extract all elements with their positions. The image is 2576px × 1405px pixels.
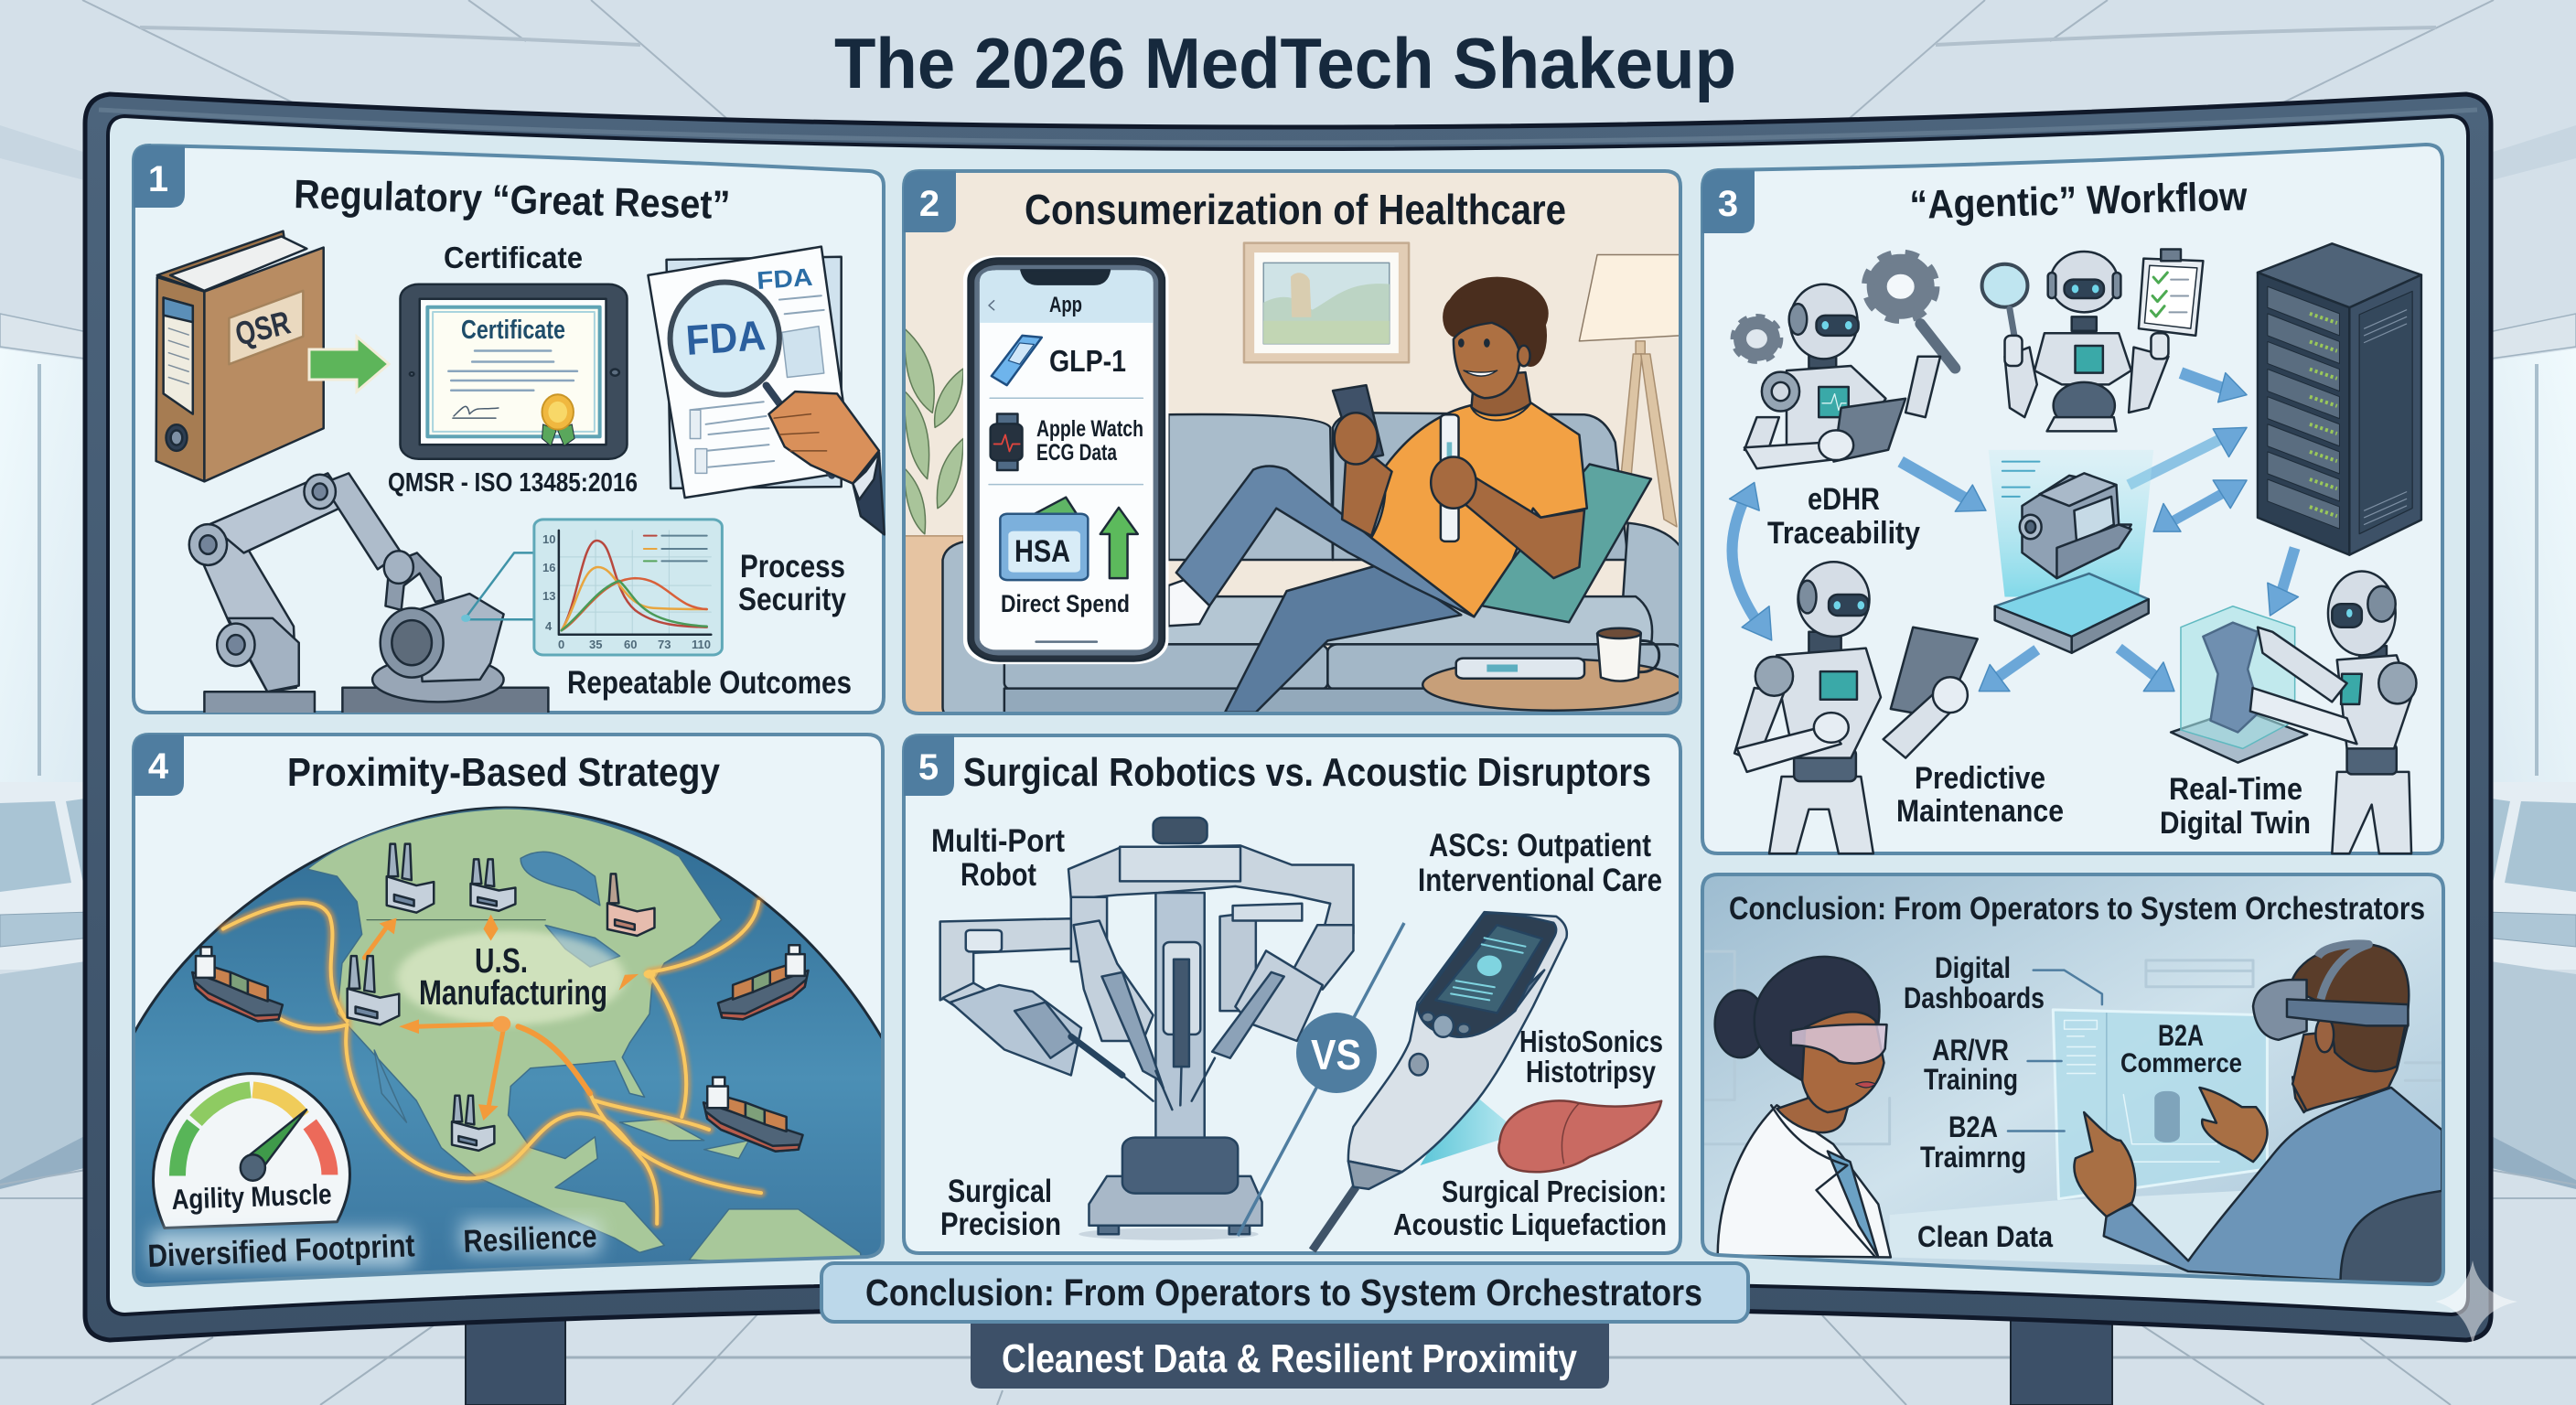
- labels: acoustic side: HistoSonics: [1519, 1024, 1663, 1058]
- label: repeatable outcomes: Repeatable Outcomes: [567, 665, 852, 701]
- badge 3: 3: [1718, 184, 1738, 224]
- robot: digital twin: [2171, 571, 2416, 853]
- phone labels: Direct Spend: [1001, 590, 1130, 617]
- label: qmsr: QMSR - ISO 13485:2016: [388, 468, 638, 498]
- labels: hologram: Clean Data: [1917, 1220, 2053, 1253]
- chart tick labels: 13: [542, 589, 555, 603]
- arrow: green: [309, 337, 389, 391]
- label: us manufacturing: [419, 942, 607, 1013]
- chart tick labels: 35: [589, 638, 602, 651]
- badge 1: [134, 145, 185, 208]
- fda labels: FDA: [756, 263, 813, 295]
- fda labels: FDA: [684, 311, 767, 364]
- illustration: hologram printer: [1989, 450, 2153, 653]
- labels: workflow: Predictive: [1915, 761, 2045, 796]
- labels: hologram: B2A: [1948, 1110, 1998, 1143]
- arrows: workflow: [1730, 373, 2298, 692]
- heading: Proximity-Based Strategy: [287, 750, 720, 795]
- fda labels: [684, 263, 813, 364]
- label: agility muscle: Agility Muscle: [171, 1178, 332, 1216]
- divider: [1238, 923, 1404, 1236]
- labels: acoustic side: Histotripsy: [1526, 1055, 1657, 1089]
- icon: robot arm with part: [189, 473, 722, 716]
- badge 4: [134, 735, 184, 796]
- labels: hologram: Training: [1924, 1063, 2018, 1096]
- chart tick labels: 110: [692, 638, 711, 651]
- illustration: server rack: [2258, 243, 2421, 555]
- labels: workflow: Digital Twin: [2160, 806, 2311, 841]
- labels: acoustic side: ASCs: Outpatient: [1429, 828, 1651, 863]
- title: The 2026 MedTech Shakeup: [834, 23, 1736, 103]
- monitor stand: left leg: [466, 1314, 565, 1405]
- labels: hologram: B2A: [2158, 1019, 2204, 1052]
- halos under labels: [151, 1221, 599, 1267]
- label: certificate: Certificate: [444, 241, 583, 274]
- phone labels: GLP-1: [1049, 344, 1126, 378]
- panel 6 border: [1702, 874, 2443, 1284]
- labels: acoustic side: Acoustic Liquefaction: [1393, 1207, 1667, 1241]
- label: process security: Security: [738, 582, 846, 617]
- robot: predictive: [1734, 562, 1978, 853]
- chart tick labels: 16: [542, 561, 555, 574]
- panel 4 border: [134, 735, 883, 1285]
- heading: Surgical Robotics vs. Acoustic Disruptors: [963, 750, 1651, 795]
- monitor stand: right leg: [2011, 1314, 2112, 1405]
- icon: fda documents and magnifier: [648, 247, 885, 534]
- label: us manufacturing: Manufacturing: [419, 974, 607, 1013]
- robot: edhr: [1735, 256, 1955, 468]
- label: diversified footprint: Diversified Footprint: [147, 1228, 415, 1274]
- living room illustration: [904, 243, 1684, 718]
- phone labels: App: [1049, 293, 1082, 317]
- badge 5: 5: [918, 747, 939, 788]
- labels: workflow: eDHR: [1808, 482, 1880, 517]
- panel 4: proximity-based strategy: [119, 735, 896, 1299]
- labels: robot side: [931, 823, 1065, 1242]
- labels: hologram: Digital: [1935, 951, 2011, 984]
- labels: robot side: Multi-Port: [931, 823, 1065, 859]
- phone labels: Apple Watch: [1036, 416, 1143, 442]
- labels: acoustic side: [1393, 828, 1667, 1241]
- map: globe: [119, 808, 896, 1299]
- panel 6: conclusion: [1702, 874, 2448, 1289]
- illustration: operators with hologram: [1703, 944, 2448, 1289]
- badge 1: 1: [148, 159, 168, 199]
- badge 4: 4: [148, 746, 169, 787]
- phone labels: ECG Data: [1036, 440, 1118, 466]
- badge 5: [904, 735, 954, 796]
- heading: Consumerization of Healthcare: [1025, 186, 1566, 233]
- vs badge: [1296, 1013, 1377, 1093]
- takeaway banner: [971, 1324, 1609, 1389]
- takeaway banner: Cleanest Data & Resilient Proximity: [1002, 1336, 1577, 1381]
- phone labels: [1001, 293, 1143, 617]
- phone: [963, 255, 1168, 664]
- labels: workflow: Traceability: [1767, 516, 1920, 551]
- labels: acoustic side: Surgical Precision:: [1442, 1174, 1667, 1208]
- vs badge: VS: [1311, 1031, 1361, 1078]
- gauge: agility muscle: [153, 1074, 349, 1228]
- panel 2: consumerization of healthcare: [904, 171, 1684, 718]
- chart tick labels: [542, 532, 711, 651]
- conclusion banner: [821, 1263, 1748, 1322]
- panel 5: surgical robotics vs acoustic disruptors: [904, 735, 1680, 1253]
- chart tick labels: 60: [624, 638, 637, 651]
- labels: workflow: Real-Time: [2169, 772, 2302, 807]
- chart tick labels: 4: [545, 619, 553, 633]
- illustration: histotripsy device and liver: [1313, 912, 1661, 1250]
- chart tick labels: 0: [558, 638, 564, 651]
- tablet certificate title: Certificate: [461, 316, 565, 345]
- label: resilience: Resilience: [463, 1218, 597, 1260]
- label: process security: Process: [740, 549, 845, 585]
- labels: hologram: Traimrng: [1920, 1141, 2026, 1174]
- labels: workflow: Maintenance: [1896, 794, 2064, 829]
- badge 2: 2: [919, 184, 939, 224]
- labels: hologram: AR/VR: [1932, 1034, 2009, 1067]
- label: process security: [738, 549, 846, 617]
- labels: workflow: [1767, 482, 2311, 841]
- illustration: multi-port surgical robot: [940, 818, 1353, 1240]
- chart tick labels: 73: [658, 638, 671, 651]
- labels: hologram: [1904, 951, 2242, 1253]
- badge 2: [904, 171, 956, 232]
- label: QSR: QSR: [231, 303, 294, 353]
- monitor screen: [108, 116, 2468, 1314]
- heading: “Agentic” Workflow: [1909, 174, 2249, 228]
- chart tick labels: 10: [542, 532, 555, 546]
- panel 2 border: [904, 171, 1680, 713]
- robot: inspection: [1982, 249, 2203, 431]
- badge 3: [1702, 170, 1755, 233]
- labels: robot side: Precision: [940, 1207, 1061, 1242]
- watermark: sparkle: [2435, 1260, 2517, 1345]
- labels: robot side: Robot: [961, 857, 1036, 893]
- label: us manufacturing: U.S.: [475, 942, 528, 981]
- phone labels: HSA: [1014, 534, 1070, 569]
- conclusion banner: Conclusion: From Operators to System Orchestrators: [865, 1271, 1702, 1314]
- icon: qsr binder: [156, 231, 324, 481]
- labels: hologram: Commerce: [2120, 1048, 2242, 1078]
- heading: Conclusion: From Operators to System Orchestrators: [1729, 891, 2425, 927]
- labels: robot side: Surgical: [948, 1174, 1052, 1209]
- labels: acoustic side: Interventional Care: [1418, 863, 1662, 898]
- panel 1: regulatory great reset: [134, 145, 885, 716]
- labels: hologram: Dashboards: [1904, 981, 2045, 1014]
- icon: tablet certificate: [401, 284, 627, 459]
- heading: Regulatory “Great Reset”: [294, 172, 731, 228]
- panel 3: agentic workflow: [1702, 145, 2442, 853]
